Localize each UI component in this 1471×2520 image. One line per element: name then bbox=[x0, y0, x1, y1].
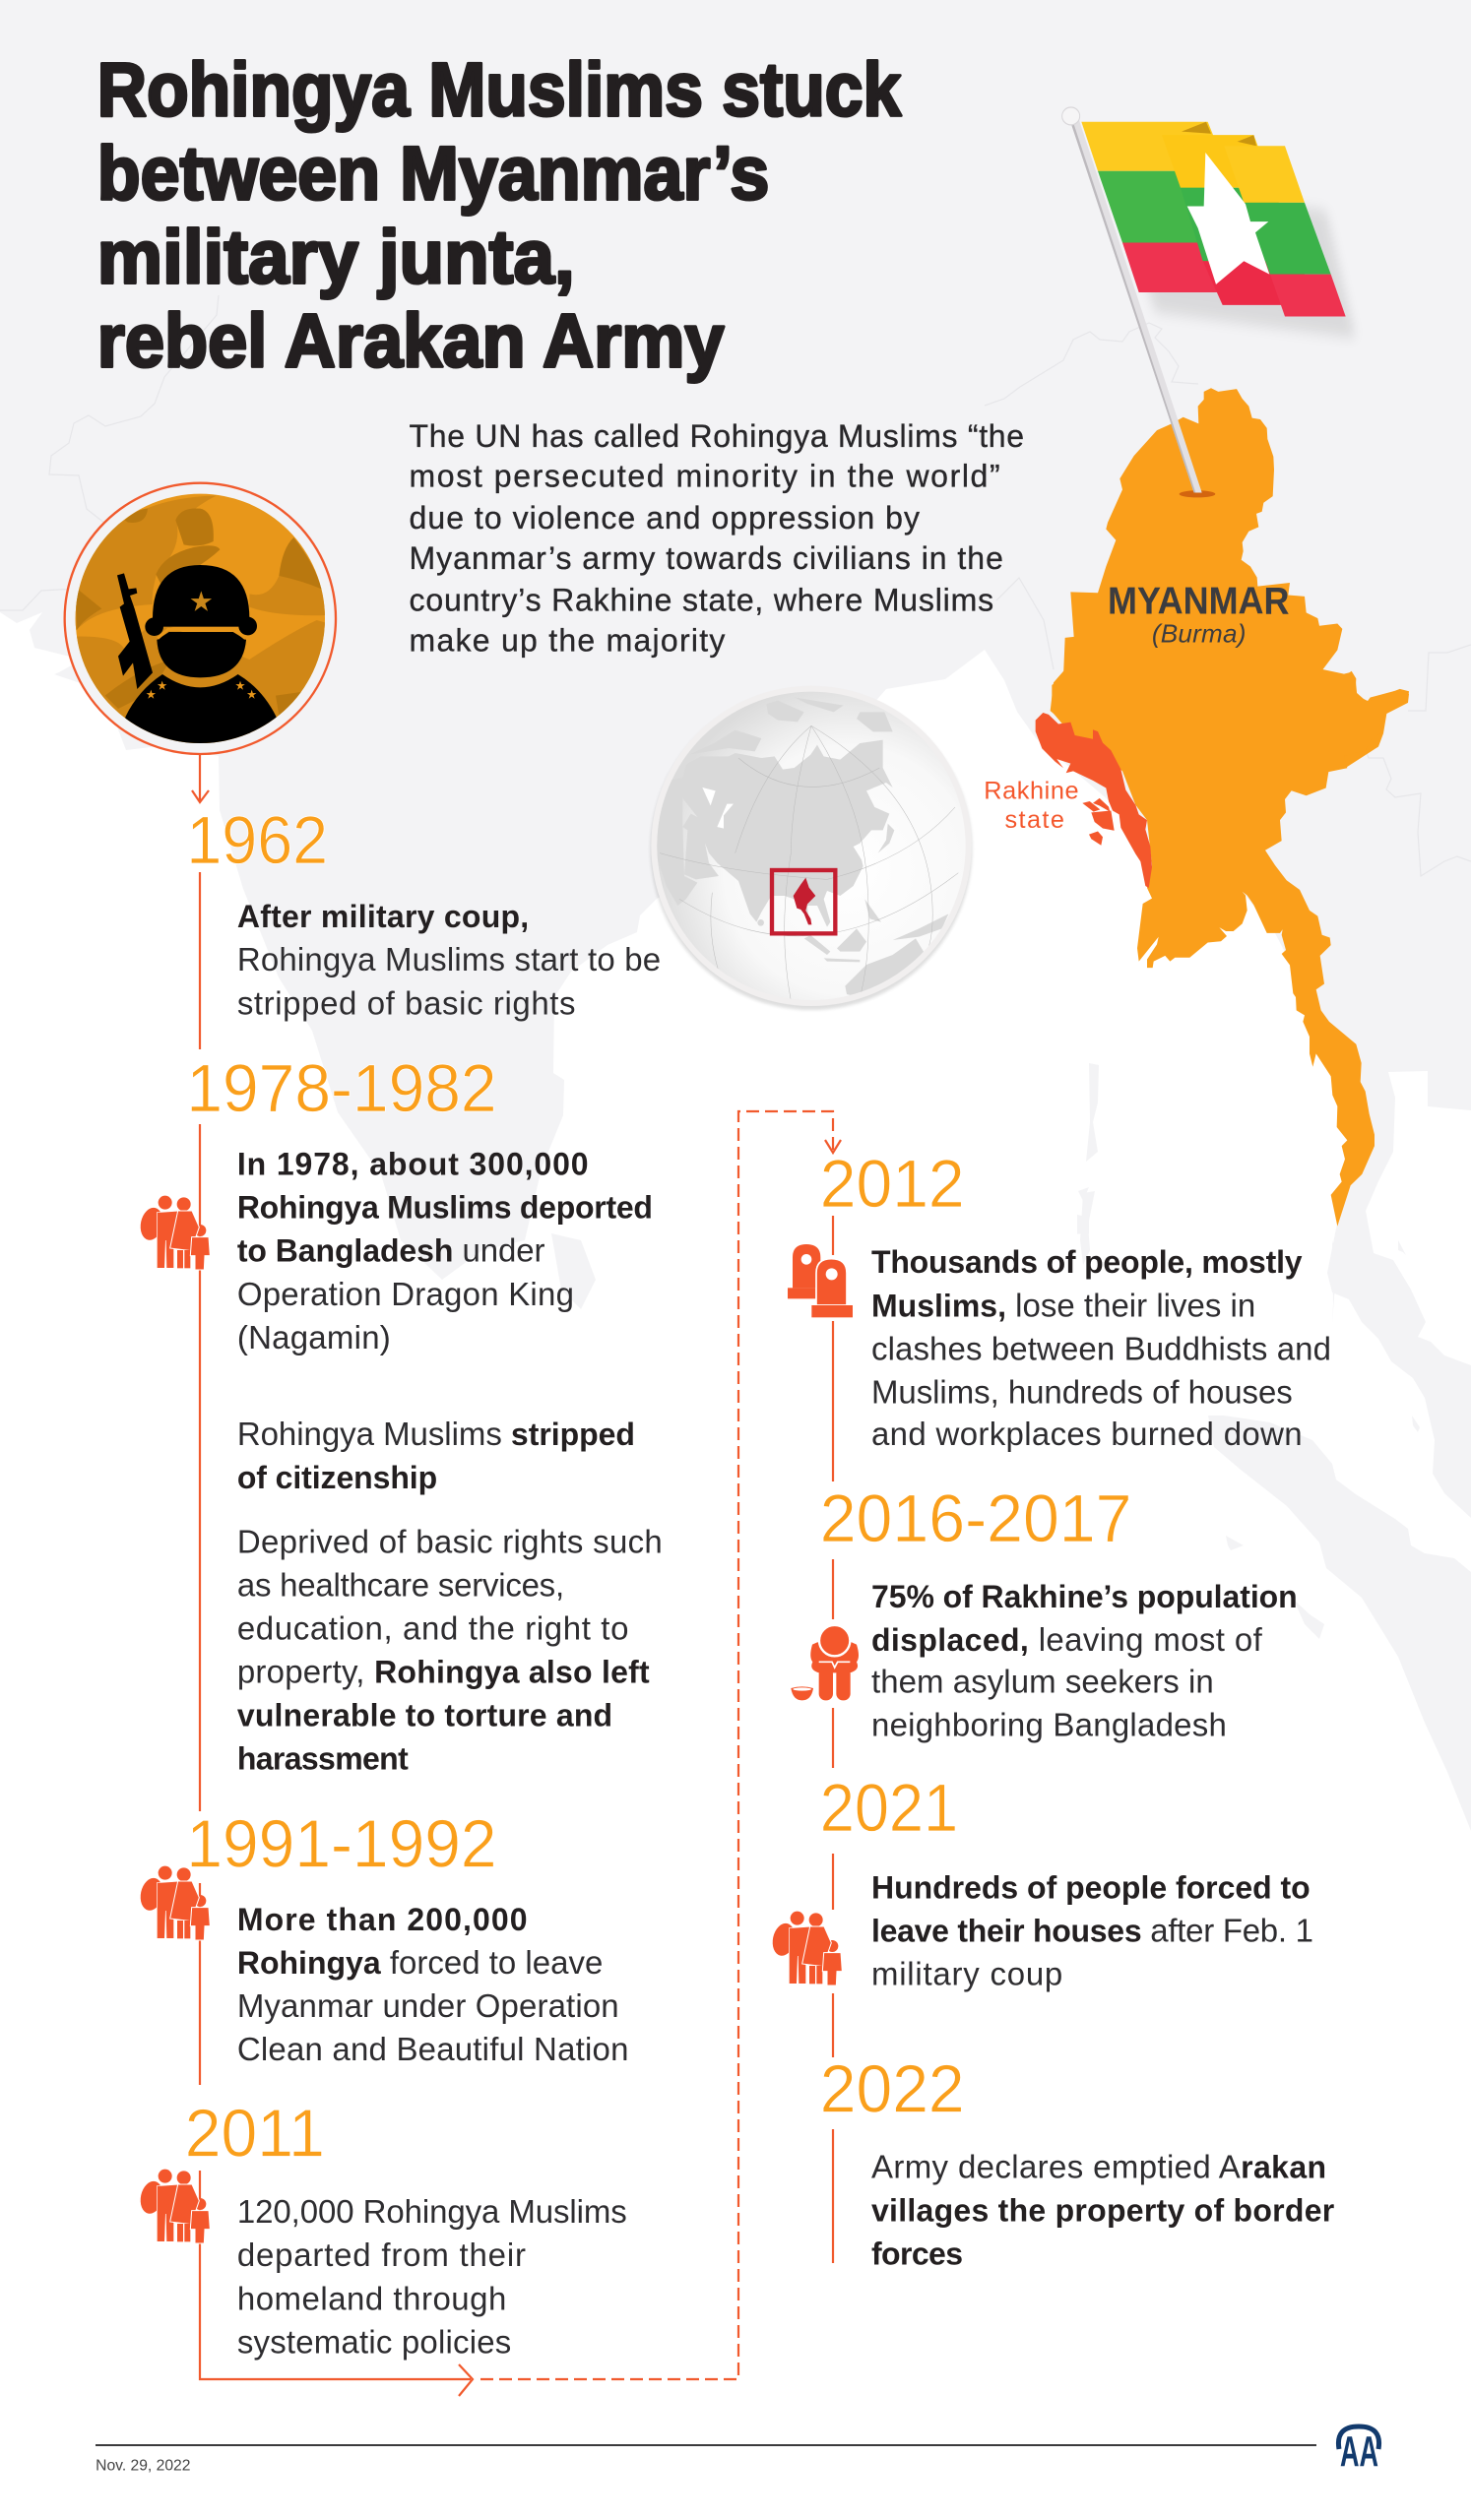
intro text: Myanmar’s army towards civilians in the bbox=[410, 540, 1003, 576]
intro text: most persecuted minority in the world” bbox=[410, 459, 1000, 494]
entry: 2011: departed from their bbox=[237, 2236, 526, 2273]
entry: 2012: 2012 bbox=[820, 1146, 965, 1222]
soldier emblem bbox=[65, 483, 336, 754]
intro text: make up the majority bbox=[410, 622, 725, 658]
entry: 2011 bbox=[185, 2095, 627, 2360]
title: military junta, bbox=[97, 216, 575, 299]
entry: 2021: leave their houses after Feb. 1 bbox=[871, 1912, 1313, 1948]
entry: 1978-1982: education, and the right to bbox=[237, 1609, 628, 1646]
entry: 1962: stripped of basic rights bbox=[237, 984, 576, 1021]
entry: 1978-1982: In 1978, about 300,000 bbox=[237, 1147, 589, 1182]
intro text: The UN has called Rohingya Muslims “the bbox=[410, 418, 1024, 454]
map: Rakhine state bbox=[1036, 713, 1152, 888]
entry: 2022: forces bbox=[871, 2236, 963, 2272]
entry: 2022: villages the property of border bbox=[871, 2193, 1334, 2229]
entry: 1991-1992: Clean and Beautiful Nation bbox=[237, 2031, 628, 2067]
entry: 1991-1992: Myanmar under Operation bbox=[237, 1987, 619, 2024]
entry: 2021: military coup bbox=[871, 1956, 1062, 1992]
family icon: 1978 bbox=[138, 1196, 210, 1270]
entry: 1978-1982: of citizenship bbox=[237, 1460, 437, 1495]
footer rule bbox=[96, 2444, 1316, 2446]
entry: 2021 bbox=[820, 1770, 1313, 1992]
family icon: 2011 bbox=[138, 2170, 210, 2243]
entry: 1978-1982: as healthcare services, bbox=[237, 1566, 564, 1603]
entry: 2016-2017: them asylum seekers in bbox=[871, 1663, 1214, 1699]
map: Myanmar bbox=[1051, 388, 1409, 1227]
title: Rohingya Muslims stuck bbox=[97, 49, 901, 133]
family icon: 2021 bbox=[770, 1912, 842, 1985]
entry: 2016-2017: 2016-2017 bbox=[820, 1480, 1131, 1556]
icon: displaced person with bowl bbox=[791, 1625, 859, 1700]
intro text bbox=[410, 418, 1024, 658]
entry: 2021: 2021 bbox=[820, 1770, 958, 1846]
entry: 2012: clashes between Buddhists and bbox=[871, 1330, 1331, 1366]
entry: 2011: systematic policies bbox=[237, 2323, 511, 2360]
flag pole bbox=[1062, 107, 1215, 497]
entry: 2022: 2022 bbox=[820, 2050, 965, 2126]
map label: Myanmar: MYANMAR bbox=[1108, 581, 1290, 623]
entry: 2022 bbox=[820, 2050, 1334, 2272]
family icon: 1991 bbox=[138, 1866, 210, 1940]
entry: 1978-1982: (Nagamin) bbox=[237, 1319, 391, 1355]
entry: 1962 bbox=[186, 802, 661, 1021]
entry: 2012: and workplaces burned down bbox=[871, 1416, 1303, 1452]
entry: 1978-1982: Deprived of basic rights such bbox=[237, 1523, 663, 1559]
entry: 2016-2017: neighboring Bangladesh bbox=[871, 1706, 1227, 1742]
date: Nov. 29, 2022 bbox=[96, 2458, 190, 2475]
timeline connectors and arrows bbox=[192, 754, 841, 2396]
entry: 1991-1992: More than 200,000 bbox=[237, 1902, 528, 1937]
logo: AA bbox=[1338, 2426, 1379, 2476]
red locator square with Myanmar bbox=[772, 870, 835, 933]
title bbox=[97, 49, 901, 383]
entry: 2012: Thousands of people, mostly bbox=[871, 1244, 1303, 1280]
entry: 2016-2017: displaced, leaving most of bbox=[871, 1621, 1263, 1658]
logo: AA: AA bbox=[1340, 2427, 1378, 2476]
entry: 1978-1982 bbox=[186, 1050, 663, 1777]
entry: 2016-2017: 75% of Rakhine’s population bbox=[871, 1579, 1298, 1614]
intro text: country’s Rakhine state, where Muslims bbox=[410, 582, 993, 617]
flag of Myanmar on pole bbox=[1062, 107, 1356, 497]
background map: Sumatra, Sri Lanka and islands bbox=[551, 1063, 1471, 1831]
entry: 2011: homeland through bbox=[237, 2280, 506, 2316]
entry: 1962: Rohingya Muslims start to be bbox=[237, 941, 661, 977]
title: rebel Arakan Army bbox=[97, 299, 725, 383]
entry: 1991-1992: 1991-1992 bbox=[186, 1805, 497, 1881]
entry: 2011: 2011 bbox=[185, 2095, 325, 2171]
entry: 1978-1982: vulnerable to torture and bbox=[237, 1698, 612, 1733]
entry: 2012 bbox=[820, 1146, 1331, 1452]
entry: 1978-1982: Operation Dragon King bbox=[237, 1276, 574, 1312]
entry: 1978-1982: 1978-1982 bbox=[186, 1050, 497, 1126]
map label: Myanmar bbox=[1108, 581, 1290, 648]
entry: 1978-1982: Rohingya Muslims stripped bbox=[237, 1416, 635, 1452]
map label: Rakhine state: state bbox=[1004, 806, 1064, 834]
entry: 1962: After military coup, bbox=[237, 899, 529, 934]
map label: Myanmar: (Burma) bbox=[1152, 618, 1246, 648]
flag cloth bbox=[1081, 122, 1346, 317]
entry: 1978-1982: harassment bbox=[237, 1741, 409, 1777]
background map: country borders bbox=[0, 295, 1471, 876]
entry: 2012: Muslims, lose their lives in bbox=[871, 1287, 1255, 1323]
entry: 2016-2017 bbox=[820, 1480, 1298, 1742]
map label: Rakhine state bbox=[984, 778, 1079, 834]
entry: 1978-1982: property, Rohingya also left bbox=[237, 1654, 650, 1690]
entry: 1978-1982: Rohingya Muslims deported bbox=[237, 1190, 653, 1226]
entry: 1978-1982: to Bangladesh under bbox=[237, 1232, 545, 1269]
entry: 2021: Hundreds of people forced to bbox=[871, 1869, 1311, 1905]
entry: 1991-1992 bbox=[186, 1805, 628, 2067]
entry: 2022: Army declares emptied Arakan bbox=[871, 2148, 1326, 2184]
intro text: due to violence and oppression by bbox=[410, 500, 920, 536]
globe locator bbox=[651, 686, 972, 1010]
icon: gravestones bbox=[788, 1244, 853, 1317]
entry: 2012: Muslims, hundreds of houses bbox=[871, 1373, 1293, 1410]
map label: Rakhine state: Rakhine bbox=[984, 778, 1079, 805]
entry: 2011: 120,000 Rohingya Muslims bbox=[237, 2193, 627, 2230]
entry: 1962: 1962 bbox=[186, 802, 328, 878]
background map: sea bbox=[0, 612, 1471, 2520]
title: between Myanmar’s bbox=[97, 132, 769, 216]
entry: 1991-1992: Rohingya forced to leave bbox=[237, 1944, 603, 1981]
